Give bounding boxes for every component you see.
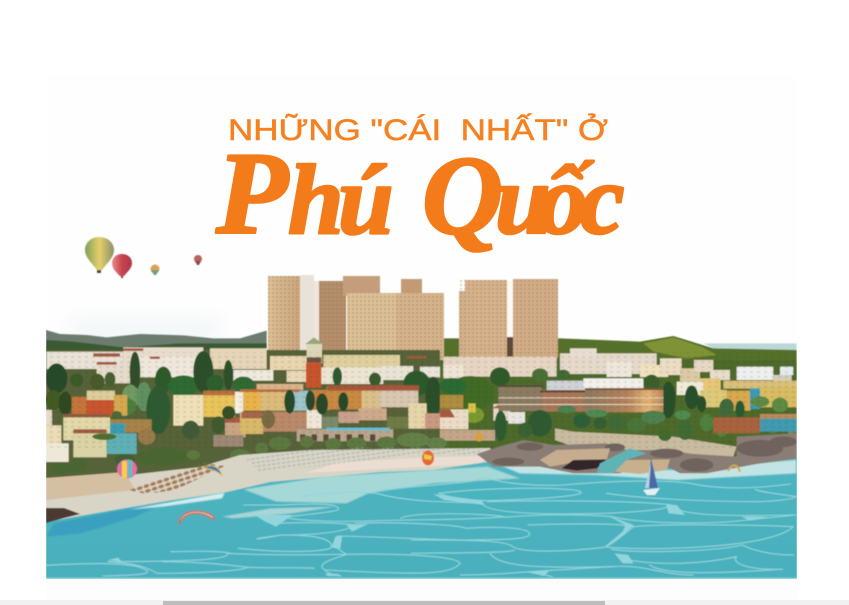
- script title: [215, 128, 624, 259]
- terraces backdrop: [440, 360, 797, 457]
- town backdrop: [46, 350, 440, 480]
- hot air balloons: [85, 237, 202, 278]
- word: Phú: Phú: [215, 128, 394, 259]
- sun loungers: [245, 447, 480, 472]
- tower F: [513, 279, 558, 358]
- sandy patch: [613, 459, 670, 474]
- lower page band: [46, 579, 797, 600]
- tower blocks: [268, 275, 558, 360]
- hill highlight: [643, 337, 717, 358]
- dark rock bottom left: [46, 508, 80, 523]
- left town: [45, 337, 441, 480]
- horizon sea: [703, 343, 797, 352]
- thick caustic junctions: [108, 494, 769, 576]
- tower gap: [507, 281, 513, 337]
- rock shading: [492, 436, 797, 472]
- horizontal scrollbar track: [0, 600, 849, 605]
- beach sand: [46, 448, 500, 525]
- sailboat: [643, 458, 660, 495]
- tower A: [268, 275, 314, 360]
- balloon: large yellow-green: [85, 237, 114, 273]
- rainbow parasail near rocks: [474, 432, 484, 442]
- rocky shore: [477, 433, 797, 474]
- kite over water: [179, 511, 214, 525]
- shallow water glow: [46, 460, 796, 537]
- beach ball right: [422, 450, 434, 466]
- sea cave: [562, 459, 607, 471]
- near forest: [46, 340, 268, 350]
- sandy rock platform: [540, 448, 610, 467]
- right trees: [439, 367, 788, 423]
- tower B: [314, 281, 346, 360]
- paraglider on the beach: [204, 466, 222, 476]
- right town: [439, 348, 797, 457]
- left colourful houses: [46, 391, 152, 462]
- left hills: [46, 330, 268, 351]
- word: Quốc: Quốc: [422, 134, 624, 258]
- resort illustration: [45, 275, 797, 579]
- beach umbrellas: [128, 463, 225, 494]
- green hill: [440, 336, 797, 380]
- cypress trees: [92, 390, 348, 445]
- rock mass: [477, 433, 797, 473]
- tan path at far left of beach: [46, 472, 135, 500]
- title line: NHỮNG "CÁI NHẤT" Ở: [228, 113, 608, 147]
- image sky background: [46, 75, 797, 579]
- sky haze above left hills: [80, 322, 210, 336]
- town texture: [46, 352, 797, 450]
- balloon: small red far: [194, 255, 202, 265]
- right hills and horizon: [440, 336, 797, 380]
- arcade and pool: [297, 428, 393, 441]
- central hotels: [173, 384, 440, 447]
- beach palms: [48, 433, 447, 474]
- kite near rocks: [728, 465, 740, 472]
- left cottages of right half: [440, 395, 525, 441]
- distant mountains: [46, 330, 268, 348]
- horizontal scrollbar thumb: [163, 601, 605, 605]
- tower D: [396, 279, 444, 360]
- tidal pool: [597, 448, 647, 473]
- tower C: [343, 276, 396, 360]
- terrace wall: [555, 428, 737, 457]
- sea bottom rim: [46, 578, 797, 579]
- balloon: red: [112, 254, 132, 278]
- garden trees: [495, 405, 796, 441]
- clock tower: [305, 337, 323, 388]
- white hillside villas: [47, 347, 440, 384]
- pale pink sand strip: [305, 456, 490, 473]
- tower E: [459, 280, 507, 358]
- dark hillside trees: [45, 351, 441, 434]
- tower dark base: [507, 337, 513, 358]
- water caustics: [46, 477, 796, 577]
- small coastal houses: [713, 414, 797, 433]
- convention centre: [498, 378, 663, 412]
- right hillside villas: [443, 348, 797, 411]
- sea: [46, 453, 797, 579]
- balloon: small multicolour: [150, 264, 160, 275]
- colourful ball on the beach: [117, 460, 137, 478]
